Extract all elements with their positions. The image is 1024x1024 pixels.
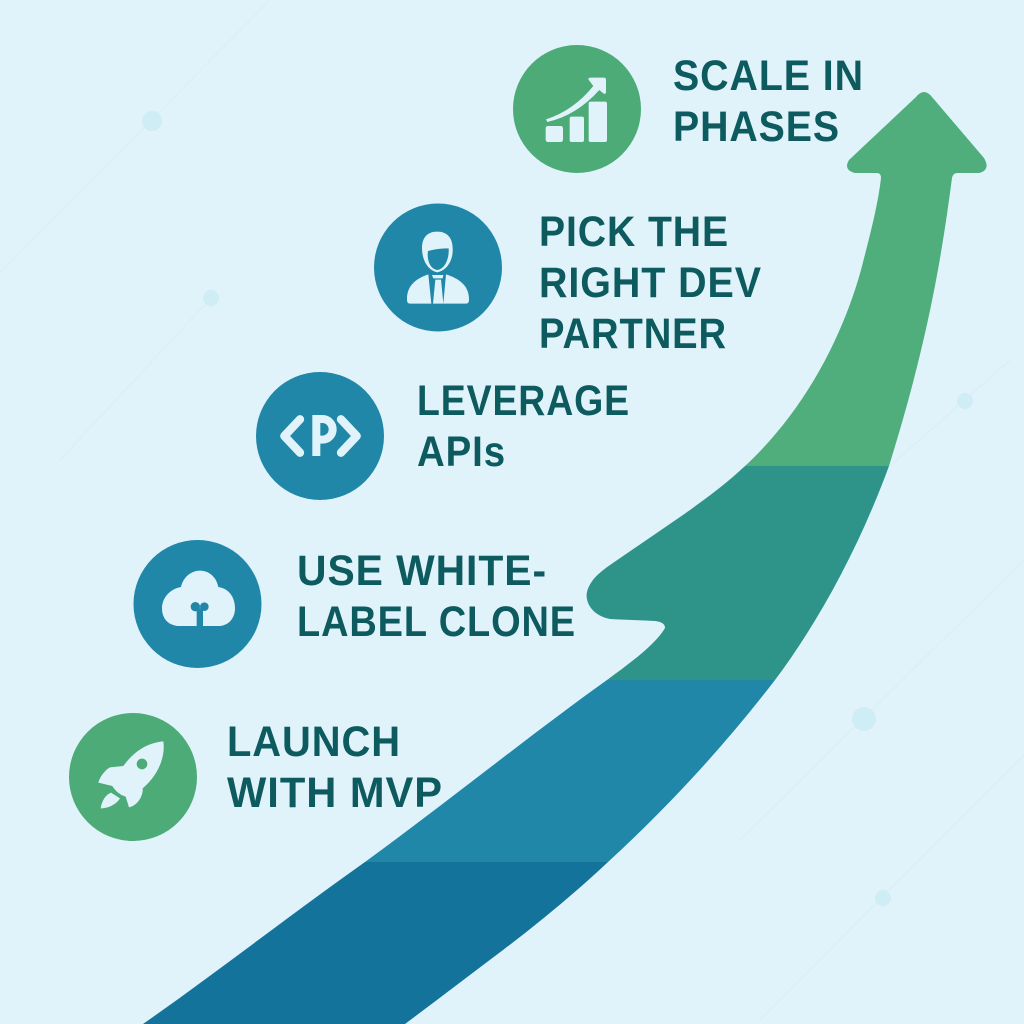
- growth arrow: [143, 92, 987, 1024]
- label: launch with mvp: LAUNCH: [227, 718, 401, 766]
- label: use white-label clone: [297, 547, 576, 646]
- icon: business person: [374, 204, 502, 332]
- label: leverage apis: LEVERAGE: [417, 377, 630, 425]
- label: leverage apis: APIs: [417, 428, 506, 476]
- label: pick the right dev partner: RIGHT DEV: [539, 259, 762, 307]
- label: launch with mvp: [227, 718, 443, 817]
- step 1: launch with mvp: [69, 713, 443, 841]
- step 3: leverage apis: [256, 372, 630, 500]
- label: scale in phases: [673, 52, 864, 151]
- step 2: use white-label clone: [134, 540, 576, 668]
- label: use white-label clone: LABEL CLONE: [297, 598, 576, 646]
- label: pick the right dev partner: PICK THE: [539, 208, 729, 256]
- icon: code brackets with P: [256, 372, 384, 500]
- label: pick the right dev partner: [539, 208, 762, 358]
- icon: rising bar chart: [513, 45, 641, 173]
- label: use white-label clone: USE WHITE-: [297, 547, 547, 595]
- label: leverage apis: [417, 377, 630, 476]
- step 4: pick the right dev partner: [374, 204, 762, 358]
- label: launch with mvp: WITH MVP: [227, 769, 443, 817]
- label: scale in phases: PHASES: [673, 103, 840, 151]
- label: scale in phases: SCALE IN: [673, 52, 864, 100]
- label: pick the right dev partner: PARTNER: [539, 310, 727, 358]
- step 5: scale in phases: [513, 45, 864, 173]
- icon: rocket: [69, 713, 197, 841]
- icon: cloud: [134, 540, 262, 668]
